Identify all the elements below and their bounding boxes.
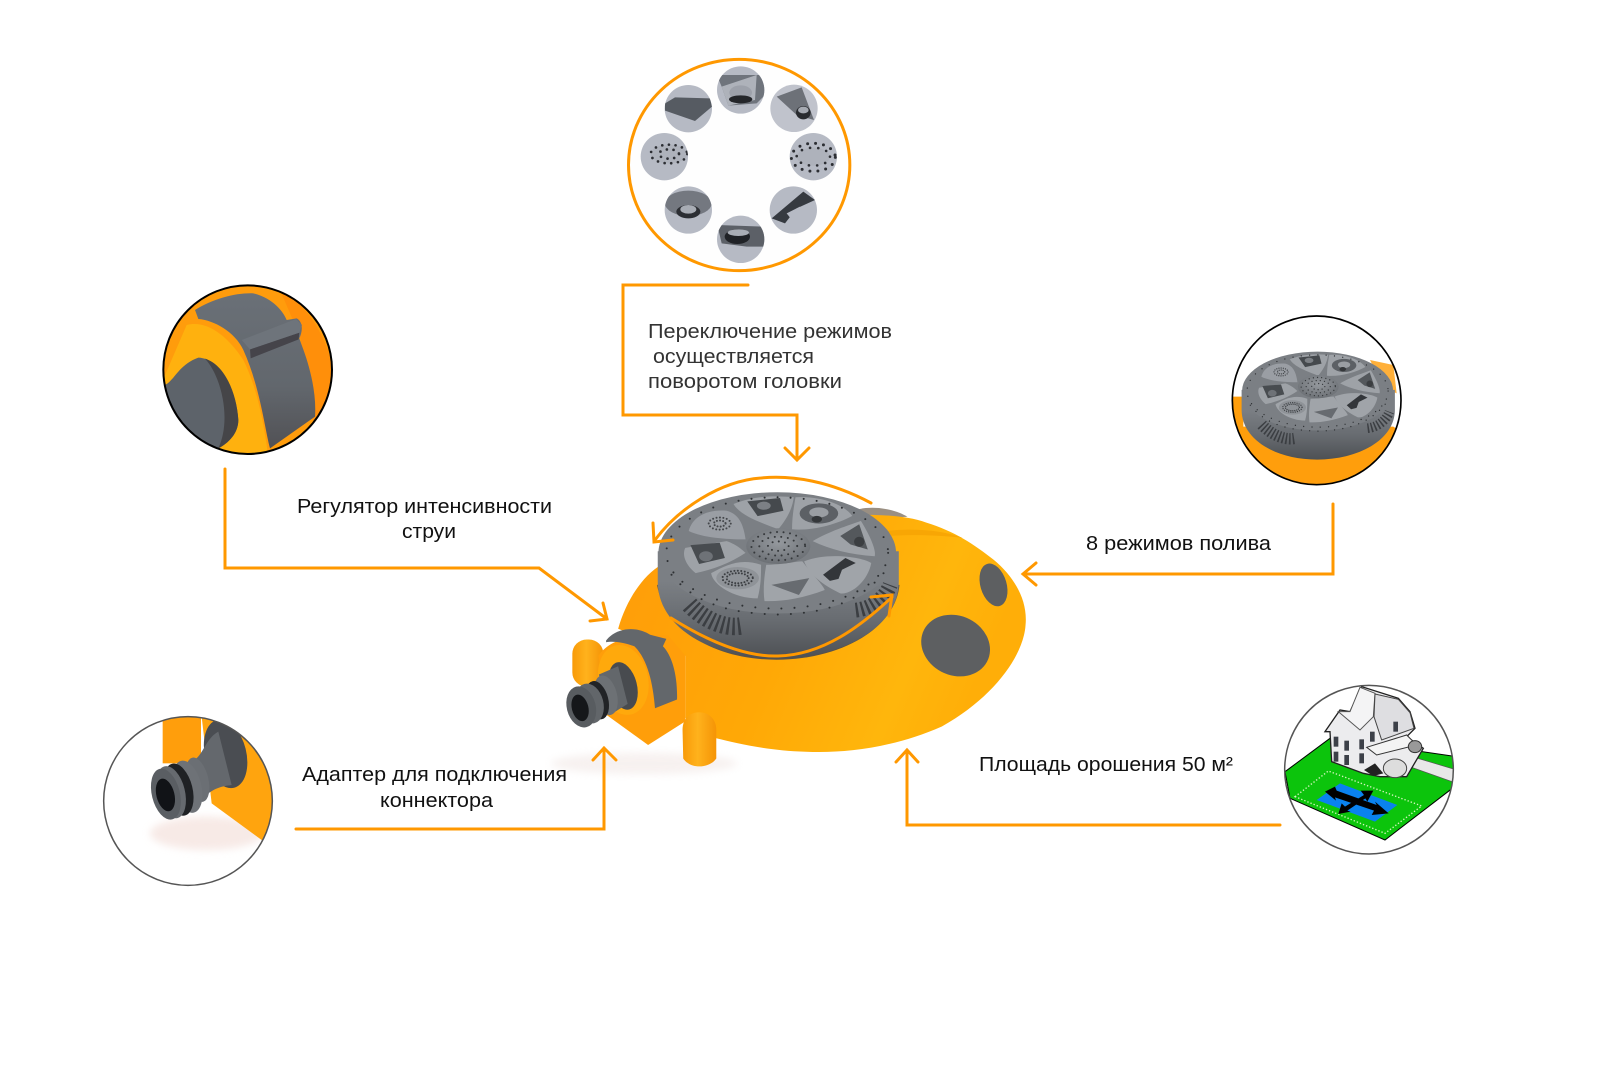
main product: ladybug sprinkler <box>551 492 1026 774</box>
text: mode switching: поворотом головки <box>648 370 842 393</box>
rotation arrow: bottom <box>671 595 892 656</box>
front post <box>683 712 716 766</box>
panel: eight modes head detail <box>1230 313 1407 490</box>
text: intensity regulator <box>297 495 552 543</box>
text: eight modes: 8 режимов полива <box>1086 532 1272 555</box>
text: mode switching: Переключение режимов <box>648 320 892 343</box>
connector: mode switching <box>623 285 809 460</box>
hose connector <box>559 659 644 731</box>
text: adapter: коннектора <box>380 789 494 812</box>
panel: eight nozzle modes <box>628 59 850 271</box>
panel: adapter detail <box>100 713 277 890</box>
rotation arrow: top <box>653 477 871 542</box>
text: mode switching: осуществляется <box>653 345 814 368</box>
text: mode switching <box>648 320 892 393</box>
connector: irrigation area <box>896 750 1280 825</box>
text: intensity regulator: Регулятор интенсивности <box>297 495 552 518</box>
connector: adapter <box>296 748 616 829</box>
text: adapter <box>302 763 567 812</box>
panel: intensity regulator detail <box>160 283 337 460</box>
coupling block <box>599 635 685 745</box>
panel: irrigation area illustration <box>1283 683 1457 857</box>
text: irrigation area: Площадь орошения 50 м² <box>979 753 1233 776</box>
text: adapter: Адаптер для подключения <box>302 763 567 786</box>
connector: intensity regulator <box>225 469 607 621</box>
connector: eight modes <box>1023 504 1333 585</box>
text: intensity regulator: струи <box>402 520 456 543</box>
left post <box>572 640 603 687</box>
